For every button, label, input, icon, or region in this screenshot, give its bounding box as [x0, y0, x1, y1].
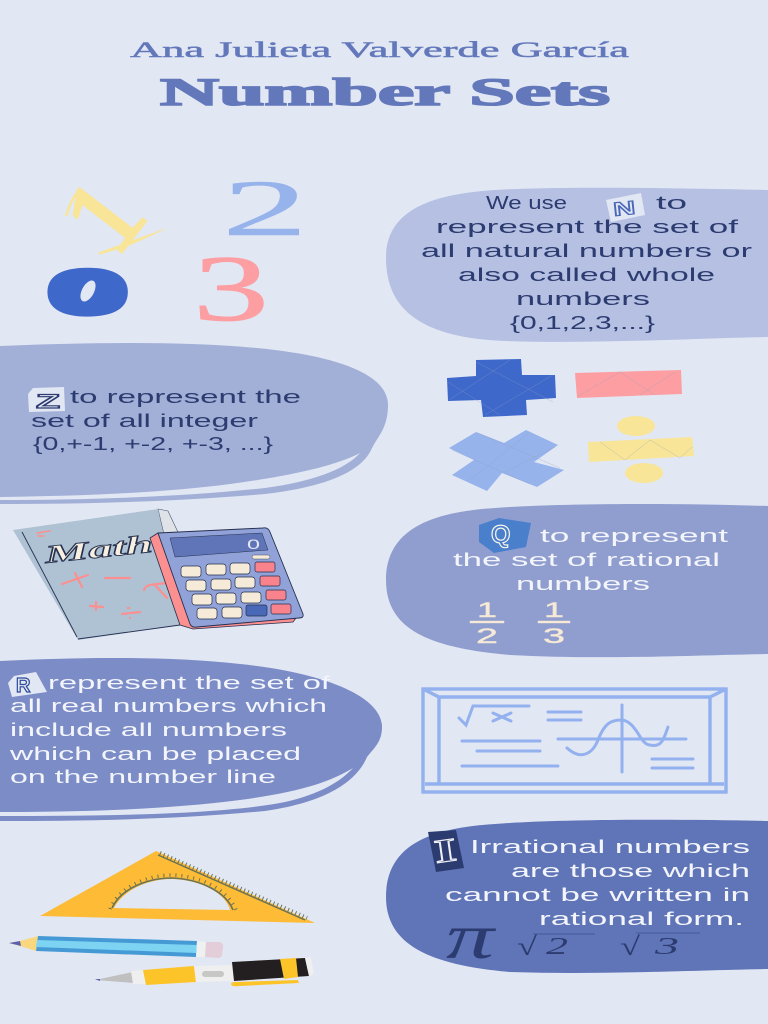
fraction one third	[538, 599, 570, 648]
panel shape	[386, 820, 768, 973]
book title: Math	[42, 531, 154, 569]
badge: Q: Q	[491, 521, 510, 549]
natural numbers text: all natural numbers or	[421, 241, 752, 261]
rational numbers text: numbers	[516, 574, 650, 594]
natural numbers text: represent the set of	[436, 217, 740, 237]
calculator screen	[170, 533, 268, 557]
fraction one third: 3	[543, 625, 565, 648]
calculator	[150, 528, 303, 629]
real numbers text: which can be placed	[8, 744, 301, 764]
calculator: 0	[247, 536, 260, 552]
panel shape with swoosh	[0, 658, 382, 821]
real numbers text	[8, 673, 332, 787]
digit 1: 1	[41, 158, 168, 274]
rational numbers text: the set of rational	[453, 550, 720, 570]
integers text: set of all integer	[31, 411, 258, 431]
badge: Z	[28, 387, 65, 413]
real numbers text: on the number line	[10, 767, 276, 787]
illustration: blackboard with function graph	[423, 689, 726, 792]
natural numbers text	[421, 193, 752, 333]
author name: Ana Julieta Valverde García	[130, 37, 629, 62]
irrational symbols	[446, 901, 700, 972]
panel shape	[386, 504, 768, 657]
natural numbers text: also called whole	[458, 265, 715, 285]
fraction one half	[470, 599, 504, 648]
rational numbers text: to represent	[540, 526, 728, 546]
minus symbol	[575, 370, 682, 398]
natural numbers text: to	[656, 193, 687, 213]
board frame	[423, 689, 726, 792]
illustration: set square, pencil and pen	[9, 851, 315, 986]
symbol: pi: π	[446, 901, 497, 972]
symbol: root two	[517, 932, 595, 961]
pen	[95, 957, 314, 986]
main heading: Number Sets	[160, 71, 610, 114]
fraction one half: 1	[477, 599, 497, 622]
set square	[40, 851, 315, 923]
title block	[130, 37, 629, 114]
symbol: root two: 2	[546, 934, 568, 960]
divide symbol	[588, 416, 694, 483]
irrational numbers text: Irrational numbers	[470, 837, 750, 857]
badge: I: I	[432, 832, 459, 871]
panel: natural numbers	[386, 188, 768, 342]
rational numbers text	[453, 526, 728, 594]
real numbers text: include all numbers	[10, 720, 287, 740]
symbol: root three: √	[620, 932, 641, 961]
badge: N	[606, 193, 645, 222]
badge: Q	[479, 518, 531, 553]
times symbol	[449, 430, 564, 491]
integers text	[31, 387, 301, 454]
panel: integers	[0, 343, 388, 504]
irrational numbers text	[445, 837, 750, 929]
real numbers text: all real numbers which	[10, 696, 327, 716]
calculator body	[150, 533, 296, 629]
panel: real numbers	[0, 658, 382, 821]
panel: rational numbers	[386, 504, 768, 657]
plus symbol	[447, 359, 556, 417]
digit 0: 0	[46, 255, 129, 329]
badge: I	[428, 830, 464, 872]
irrational numbers text: are those which	[511, 861, 750, 881]
illustration: digits 0 1 2 3	[41, 158, 308, 341]
irrational numbers text: rational form.	[539, 909, 744, 929]
natural numbers text: {0,1,2,3,...}	[510, 313, 655, 333]
integers text: {0,+-1, +-2, +-3, ...}	[33, 434, 273, 454]
badge: R: R	[16, 675, 31, 697]
natural numbers text: numbers	[516, 289, 650, 309]
panel shape with swoosh	[0, 343, 388, 504]
fraction one third: 1	[544, 599, 564, 622]
board formulas and lines	[459, 705, 693, 772]
digit 2: 2	[222, 164, 308, 253]
pencil	[9, 936, 223, 958]
panel shape	[386, 188, 768, 342]
symbol: root three: 3	[653, 934, 679, 960]
badge: Z: Z	[36, 392, 61, 413]
real numbers text: represent the set of	[48, 673, 332, 693]
integers text: to represent the	[70, 387, 301, 407]
irrational numbers text: cannot be written in	[445, 885, 750, 905]
natural numbers text: We use	[486, 193, 567, 213]
illustration: math book and calculator	[13, 509, 303, 640]
math book	[13, 509, 184, 640]
symbol hatch lines	[448, 360, 692, 484]
digit 3: 3	[193, 237, 269, 341]
book symbols	[37, 531, 167, 618]
fraction one half: 2	[476, 625, 498, 648]
calculator keys	[181, 562, 291, 619]
symbol: root two: √	[517, 932, 538, 961]
panel: irrational numbers	[386, 820, 768, 973]
symbol: root three	[620, 932, 700, 961]
badge: R	[8, 672, 47, 697]
illustration: math symbols	[447, 359, 694, 491]
badge: N: N	[612, 198, 636, 221]
